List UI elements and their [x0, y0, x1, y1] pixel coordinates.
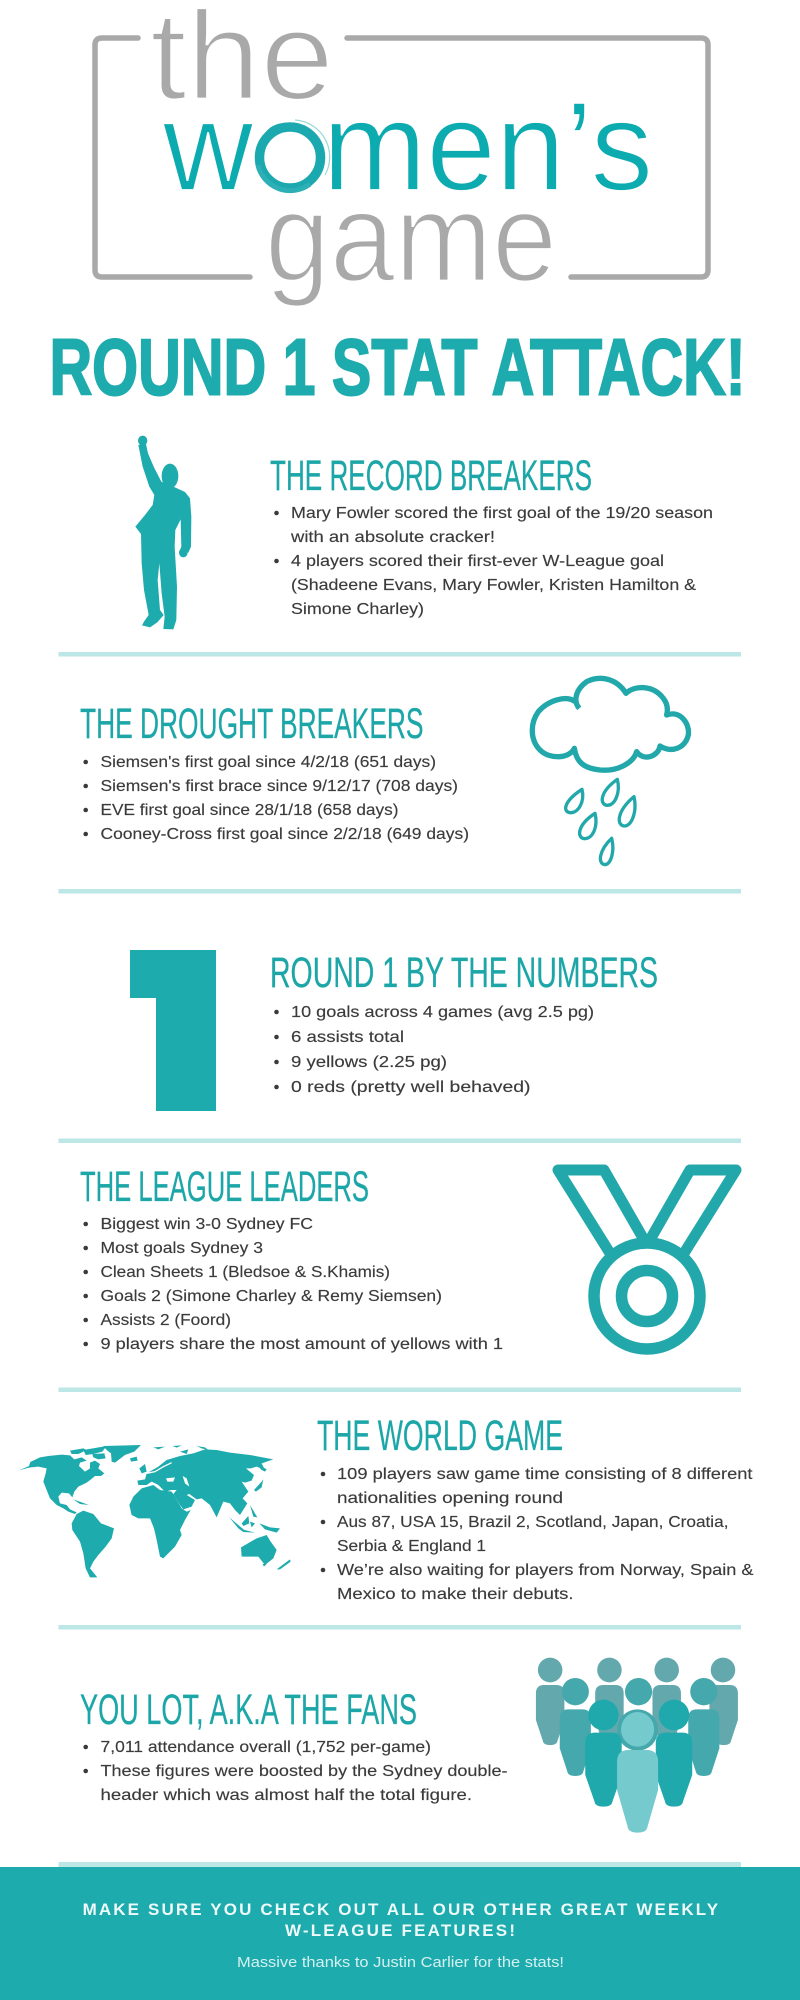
icon: figure with raised fist: [135, 436, 191, 629]
logo: the women's game: women’s: [162, 76, 653, 217]
bullet list: [83, 1216, 503, 1353]
footer call to action: W-LEAGUE FEATURES!: [285, 1921, 515, 1940]
bullet list: with an absolute cracker!: [290, 529, 495, 546]
bullet list: Aus 87, USA 15, Brazil 2, Scotland, Japan, Croatia,: [337, 1514, 728, 1531]
bullet list: Most goals Sydney 3: [100, 1240, 263, 1257]
footer banner: [0, 1867, 800, 2000]
footer call to action: MAKE SURE YOU CHECK OUT ALL OUR OTHER GREAT WEEKLY: [83, 1900, 719, 1919]
bullet list: [274, 1004, 594, 1096]
icon: world map: [19, 1445, 291, 1577]
bullet list: 10 goals across 4 games (avg 2.5 pg): [291, 1004, 594, 1021]
bullet list: 4 players scored their first-ever W-League goal: [291, 553, 664, 570]
bullet list: 9 players share the most amount of yellows with 1: [100, 1336, 503, 1353]
logo: the women's game: [95, 0, 708, 308]
heading: THE LEAGUE LEADERS: [80, 1163, 369, 1211]
heading: THE DROUGHT BREAKERS: [80, 700, 424, 748]
bullet list: Biggest win 3-0 Sydney FC: [100, 1216, 313, 1233]
bullet list: Serbia & England 1: [337, 1538, 486, 1555]
bullet list: Siemsen's first brace since 9/12/17 (708 days): [100, 778, 458, 795]
bullet list: Simone Charley): [291, 601, 424, 618]
footer call to action: [83, 1900, 719, 1940]
bullet list: [321, 1466, 754, 1603]
bullet list: (Shadeene Evans, Mary Fowler, Kristen Hamilton &: [291, 577, 696, 594]
icon: medal: [558, 1170, 736, 1349]
icon: rain cloud: [532, 678, 688, 865]
bullet list: EVE first goal since 28/1/18 (658 days): [100, 802, 398, 819]
logo: the women's game: game: [265, 167, 557, 308]
icon: big numeral one: [130, 950, 216, 1111]
heading: THE WORLD GAME: [317, 1412, 563, 1460]
bullet list: nationalities opening round: [337, 1490, 563, 1507]
bullet list: Cooney-Cross first goal since 2/2/18 (649 days): [100, 826, 469, 843]
heading: THE RECORD BREAKERS: [270, 452, 592, 500]
panel: round 1 by the numbers: [130, 949, 658, 1111]
bullet list: We’re also waiting for players from Norway, Spain &: [337, 1562, 754, 1579]
panel: the world game: [19, 1412, 754, 1603]
panel: the league leaders: [80, 1163, 736, 1353]
heading: YOU LOT, A.K.A THE FANS: [80, 1686, 417, 1734]
bullet list: [274, 505, 713, 618]
bullet list: [83, 754, 469, 843]
bullet list: 9 yellows (2.25 pg): [291, 1054, 447, 1071]
bullet list: Assists 2 (Foord): [100, 1312, 231, 1329]
bullet list: 109 players saw game time consisting of 8 different: [337, 1466, 753, 1483]
bullet list: 0 reds (pretty well behaved): [291, 1079, 530, 1096]
bullet list: Mexico to make their debuts.: [337, 1586, 574, 1603]
bullet list: header which was almost half the total figure.: [100, 1787, 472, 1804]
bullet list: Mary Fowler scored the first goal of the 19/20 season: [291, 505, 713, 522]
bullet list: Siemsen's first goal since 4/2/18 (651 days): [100, 754, 436, 771]
bullet list: These figures were boosted by the Sydney double-: [100, 1763, 508, 1780]
footer credit: Massive thanks to Justin Carlier for the stats!: [237, 1955, 564, 1971]
panel: the record breakers: [135, 436, 713, 629]
icon: crowd of people: [536, 1658, 738, 1833]
bullet list: Goals 2 (Simone Charley & Remy Siemsen): [100, 1288, 442, 1305]
bullet list: Clean Sheets 1 (Bledsoe & S.Khamis): [100, 1264, 390, 1281]
panel: the drought breakers: [80, 678, 688, 865]
bullet list: 7,011 attendance overall (1,752 per-game): [100, 1739, 431, 1756]
bullet list: 6 assists total: [291, 1029, 404, 1046]
bullet list: [83, 1739, 508, 1804]
panel: the fans: [80, 1658, 738, 1833]
